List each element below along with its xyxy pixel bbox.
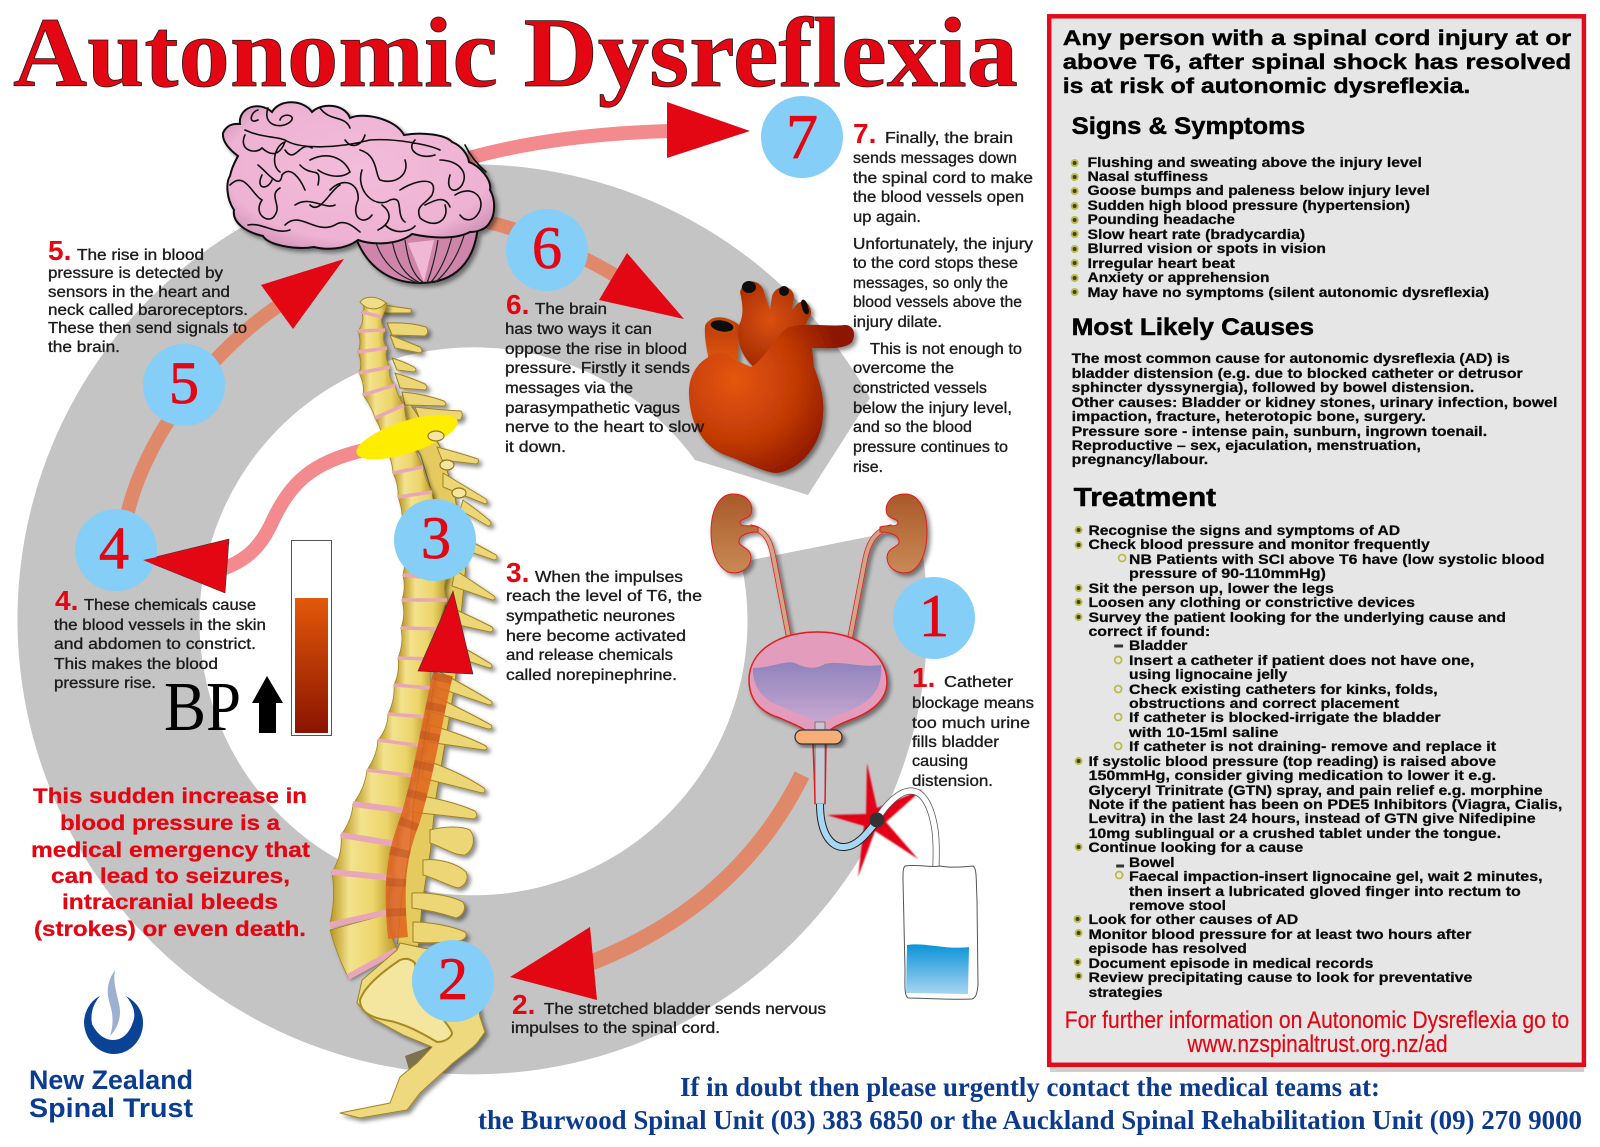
step 6 text: has two ways it can	[505, 321, 652, 338]
step 7 text: sends messages down	[853, 150, 1017, 167]
articular facets	[428, 431, 466, 498]
step 6 text: it down.	[505, 439, 566, 456]
step 2 text	[511, 989, 826, 1037]
treatment list: Review precipitating cause to look for preventative	[1088, 970, 1473, 985]
treatment list: with 10-15ml saline	[1128, 725, 1279, 740]
signs list: Irregular heart beat	[1087, 256, 1235, 271]
signs list	[1072, 155, 1489, 300]
emergency callout: can lead to seizures,	[51, 864, 290, 888]
treatment list: Faecal impaction-insert lignocaine gel, wait 2 minutes,	[1129, 869, 1543, 884]
step 6 text: pressure. Firstly it sends	[505, 360, 690, 377]
causes text: Reproductive – sex, ejaculation, menstruation,	[1072, 438, 1421, 453]
heading: most likely causes: Most Likely Causes	[1072, 314, 1314, 341]
bladder wall	[749, 632, 887, 735]
treatment list: Continue looking for a cause	[1088, 840, 1304, 855]
step 3 text: 3.	[506, 557, 529, 588]
drainage bag	[903, 865, 978, 999]
signs list: Pounding headache	[1087, 212, 1235, 227]
treatment list: remove stool	[1129, 898, 1226, 913]
atlas at top of the spine	[360, 297, 386, 309]
sacral plate	[360, 959, 452, 1042]
BP label: BP	[164, 669, 241, 746]
causes text: pregnancy/labour.	[1072, 452, 1208, 467]
treatment list: If catheter is blocked-irrigate the bladder	[1129, 710, 1442, 725]
treatment list: Document episode in medical records	[1088, 956, 1373, 971]
treatment list: Sit the person up, lower the legs	[1088, 581, 1334, 596]
arrowhead 7	[667, 102, 750, 158]
step 3 text: When the impulses	[535, 569, 683, 586]
circle 1: 1	[919, 583, 949, 649]
causes text: Other causes: Bladder or kidney stones, urinary infection, bowel	[1072, 395, 1557, 410]
bag outline	[903, 865, 978, 999]
step 5 text: 5.	[48, 235, 71, 266]
right ureter inner	[846, 527, 892, 663]
signs list: Slow heart rate (bradycardia)	[1087, 227, 1305, 242]
step 6 text: oppose the rise in blood	[505, 341, 687, 358]
intro statement	[1063, 26, 1571, 98]
circle 4: 4	[99, 515, 129, 581]
treatment list: Loosen any clothing or constrictive devices	[1088, 595, 1415, 610]
bag fluid	[906, 944, 969, 994]
arrowhead 3	[418, 591, 473, 674]
catheter in urethra	[815, 722, 825, 804]
right ureter	[846, 527, 892, 663]
step 1 text: too much urine	[912, 715, 1030, 732]
cerebrum	[223, 102, 494, 249]
step 7 text: messages, so only the	[853, 275, 1008, 292]
logo wordmark: New Zealand	[29, 1065, 193, 1095]
sacrum and coccyx	[340, 943, 485, 1118]
circle 4	[75, 509, 157, 591]
causes text	[1072, 351, 1557, 467]
circle 3	[394, 499, 476, 581]
intervertebral discs	[358, 312, 447, 776]
step 7 text: the blood vessels open	[853, 189, 1024, 206]
step 7 text: pressure continues to	[853, 439, 1008, 456]
spinous processes and articular pillars	[383, 305, 497, 945]
left ureter	[750, 527, 793, 663]
panel background	[1049, 16, 1584, 1065]
signs list: Flushing and sweating above the injury level	[1087, 155, 1422, 170]
step 7 text: injury dilate.	[853, 314, 942, 331]
treatment list: pressure of 90-110mmHg)	[1129, 566, 1326, 581]
circle 6: 6	[532, 215, 562, 281]
step 1 text: distension.	[912, 773, 993, 790]
heading: treatment: Treatment	[1074, 484, 1217, 512]
step 4 text: and abdomen to constrict.	[54, 636, 256, 653]
treatment list: Note if the patient has been on PDE5 Inhibitors (Viagra, Cialis,	[1088, 797, 1562, 812]
emergency callout: medical emergency that	[31, 838, 310, 862]
vessel openings	[742, 281, 809, 314]
icon: BP up arrow	[252, 676, 283, 733]
emergency callout: This sudden increase in	[33, 784, 307, 808]
upper chamber and great vessels	[738, 281, 811, 372]
step 7 text: and so the blood	[853, 419, 972, 436]
signs list: May have no symptoms (silent autonomic dysreflexia)	[1087, 285, 1489, 300]
treatment list: Check blood pressure and monitor frequently	[1088, 537, 1430, 552]
step 7 text: This is not enough to	[870, 341, 1022, 358]
treatment list: If systolic blood pressure (top reading) is raised above	[1088, 754, 1497, 769]
drainage tube inner	[877, 791, 936, 866]
causes text: impaction, fracture, heterotopic bone, surgery.	[1072, 409, 1426, 424]
causes text: bladder distension (e.g. due to blocked catheter or detrusor	[1072, 366, 1524, 381]
treatment list: correct if found:	[1088, 624, 1210, 639]
step 1 text: fills bladder	[912, 734, 999, 751]
treatment list: Insert a catheter if patient does not have one,	[1129, 653, 1474, 668]
step 1 text	[912, 662, 1034, 790]
intro statement: above T6, after spinal shock has resolved	[1063, 50, 1571, 74]
step 3 text: reach the level of T6, the	[506, 588, 702, 605]
arrow band: T6 to step 4	[222, 450, 365, 569]
step 4 text: This makes the blood	[54, 656, 218, 673]
step 3 text: here become activated	[506, 628, 686, 645]
step 2 text: impulses to the spinal cord.	[511, 1020, 720, 1037]
contact footer: the Burwood Spinal Unit (03) 383 6850 or the Auckland Spinal Rehabilitation Unit (09) 270 9000	[478, 1105, 1582, 1135]
treatment list	[1075, 523, 1562, 1000]
step 2 text: The stretched bladder sends nervous	[544, 1001, 826, 1018]
treatment list: then insert a lubricated gloved finger into rectum to	[1129, 884, 1521, 899]
arrow band: brain to step 7	[469, 131, 670, 158]
sacral shadow	[405, 1046, 432, 1080]
treatment list: 10mg sublingual or a crushed tablet under the tongue.	[1088, 826, 1501, 841]
circle 1	[893, 577, 975, 659]
contact footer: If in doubt then please urgently contact the medical teams at:	[680, 1072, 1380, 1102]
step 6 text: 6.	[506, 289, 529, 320]
circle 6	[506, 209, 588, 291]
causes text: Pressure sore - intense pain, sunburn, ingrown toenail.	[1072, 424, 1487, 439]
causes text: The most common cause for autonomic dysreflexia (AD) is	[1072, 351, 1510, 366]
left kidney	[711, 494, 758, 573]
treatment list: obstructions and correct placement	[1129, 696, 1400, 711]
vertebral bodies	[330, 303, 447, 977]
catheter tube	[820, 804, 877, 847]
vessel opening	[708, 317, 736, 335]
step 3 text	[506, 557, 702, 684]
step 7 text: overcome the	[853, 360, 954, 377]
step 4 text	[54, 585, 266, 692]
arrowhead 2	[510, 927, 597, 1000]
arrowhead 6	[599, 253, 684, 319]
step 7 text	[853, 118, 1033, 476]
emergency callout: blood pressure is a	[60, 811, 281, 835]
logo: New Zealand Spinal Trust	[29, 970, 193, 1123]
circle 2: 2	[438, 946, 468, 1012]
step 6 text: The brain	[535, 301, 607, 318]
step 5 text: neck called baroreceptors.	[48, 302, 248, 319]
step 5 text: sensors in the heart and	[48, 284, 230, 301]
causes text: sphincter dyssynergia), followed by bowel distension.	[1072, 380, 1474, 395]
left ureter inner	[750, 527, 793, 663]
title: Autonomic Dysreflexia	[13, 0, 1018, 108]
step 1 text: causing	[912, 753, 968, 770]
further information link	[1065, 1007, 1569, 1058]
step 3 text: sympathetic neurones	[506, 608, 675, 625]
left vessel	[705, 318, 739, 366]
step 5 text: the brain.	[48, 339, 120, 356]
lower intervertebral discs	[330, 804, 407, 977]
catheter blockage star	[827, 763, 923, 877]
arrow band: step 4 to step 5 to brain	[126, 298, 290, 520]
step 5 text	[48, 235, 248, 356]
treatment list: strategies	[1088, 985, 1163, 1000]
step 4 text: These chemicals cause	[84, 597, 256, 614]
treatment list: Monitor blood pressure for at least two hours after	[1088, 927, 1472, 942]
right kidney	[880, 494, 927, 573]
treatment list: Look for other causes of AD	[1088, 912, 1298, 927]
circle 7	[761, 96, 843, 178]
step 5 text: These then send signals to	[48, 320, 247, 337]
arrow band: bladder to step 2	[585, 775, 802, 965]
catheter tube inner	[820, 804, 877, 847]
treatment list: Recognise the signs and symptoms of AD	[1088, 523, 1400, 538]
treatment list: Survey the patient looking for the underlying cause and	[1088, 610, 1506, 625]
signs list: Nasal stuffiness	[1087, 169, 1208, 184]
step 7 text: 7.	[853, 118, 876, 149]
circle 5	[143, 344, 225, 426]
step 1 text: blockage means	[912, 695, 1034, 712]
urethra walls	[813, 744, 826, 804]
signs list: Sudden high blood pressure (hypertension)	[1087, 198, 1410, 213]
bladder	[749, 632, 887, 804]
step 6 text: parasympathetic vagus	[505, 400, 680, 417]
drainage tube	[877, 791, 936, 866]
step 6 text	[505, 289, 705, 456]
step 4 text: 4.	[55, 585, 78, 616]
step 6 text: messages via the	[505, 380, 633, 397]
heart	[689, 281, 854, 473]
intro statement: is at risk of autonomic dysreflexia.	[1063, 74, 1470, 98]
step 7 text: constricted vessels	[853, 380, 987, 397]
arrow band: brain to step 6 to heart	[488, 222, 630, 285]
circle 3: 3	[421, 505, 451, 571]
signs list: Anxiety or apprehension	[1087, 270, 1270, 285]
arrowhead 5	[261, 259, 344, 329]
heading: signs and symptoms: Signs & Symptoms	[1072, 113, 1305, 140]
step 3 text: called norepinephrine.	[506, 667, 677, 684]
brain	[223, 102, 494, 283]
step 7 text: up again.	[853, 209, 921, 226]
step 7 text: rise.	[853, 459, 883, 476]
step 2 text: 2.	[512, 989, 535, 1020]
yellow T6 level marker	[352, 405, 462, 469]
step 7 text: below the injury level,	[853, 400, 1012, 417]
urine	[753, 662, 881, 724]
treatment list: NB Patients with SCI above T6 have (low systolic blood	[1129, 552, 1545, 567]
step 6 text: nerve to the heart to slow	[505, 419, 705, 436]
circle 2	[412, 940, 494, 1022]
arrowhead 4	[143, 539, 229, 593]
circle 7: 7	[786, 101, 818, 172]
step 7 text: the spinal cord to make	[853, 170, 1033, 187]
kidneys and ureters	[711, 494, 927, 663]
step 4 text: pressure rise.	[54, 675, 156, 692]
brain folds	[230, 108, 486, 232]
main body of the heart	[689, 325, 854, 473]
step 5 text: The rise in blood	[77, 247, 204, 264]
step 7 text: blood vessels above the	[853, 294, 1022, 311]
background ring	[17, 164, 927, 1074]
step 7 text: to the cord stops these	[853, 255, 1018, 272]
panel shadow	[1050, 1062, 1584, 1072]
intro statement: Any person with a spinal cord injury at or	[1063, 26, 1571, 50]
step 1 text: Catheter	[944, 674, 1013, 691]
sphincter	[795, 730, 842, 744]
treatment list: Glyceryl Trinitrate (GTN) spray, and pain relief e.g. morphine	[1088, 783, 1543, 798]
logo: New Zealand Spinal Trust: Spinal Trust	[29, 1093, 193, 1123]
treatment list: Levitra) in the last 24 hours, instead of GTN give Nifedipine	[1088, 811, 1536, 826]
cerebellum	[356, 225, 478, 283]
spine	[330, 297, 497, 1118]
emergency callout	[31, 784, 310, 941]
treatment list: If catheter is not draining- remove and replace it	[1129, 739, 1497, 754]
step 3 text: and release chemicals	[506, 647, 673, 664]
contact footer	[478, 1072, 1582, 1135]
logo spine swirl	[108, 970, 120, 1036]
emergency callout: (strokes) or even death.	[34, 917, 306, 941]
spinal cord band: impulse pathway	[396, 674, 443, 938]
emergency callout: intracranial bleeds	[62, 890, 278, 914]
panel: key information	[1049, 16, 1584, 1072]
treatment list: Bowel	[1129, 855, 1175, 870]
further information link: www.nzspinaltrust.org.nz/ad	[1187, 1031, 1448, 1058]
treatment list: using lignocaine jelly	[1129, 667, 1288, 682]
step 5 text: pressure is detected by	[48, 265, 223, 282]
treatment list: Check existing catheters for kinks, folds,	[1129, 682, 1438, 697]
catheter blockage knob	[870, 812, 884, 828]
blood pressure gauge	[292, 540, 332, 736]
logo crescent	[84, 996, 143, 1054]
treatment list: episode has resolved	[1088, 941, 1247, 956]
treatment list: Bladder	[1129, 638, 1188, 653]
step 7 text: Unfortunately, the injury	[853, 236, 1033, 253]
treatment list: 150mmHg, consider giving medication to lower it e.g.	[1088, 768, 1496, 783]
arrowhead 4 tip over circle	[143, 557, 157, 566]
signs list: Goose bumps and paleness below injury level	[1087, 183, 1430, 198]
step 4 text: the blood vessels in the skin	[54, 617, 266, 634]
signs list: Blurred vision or spots in vision	[1087, 241, 1326, 256]
circle 5: 5	[169, 350, 199, 416]
step 1 text: 1.	[912, 662, 935, 693]
step 7 text: Finally, the brain	[885, 130, 1013, 147]
